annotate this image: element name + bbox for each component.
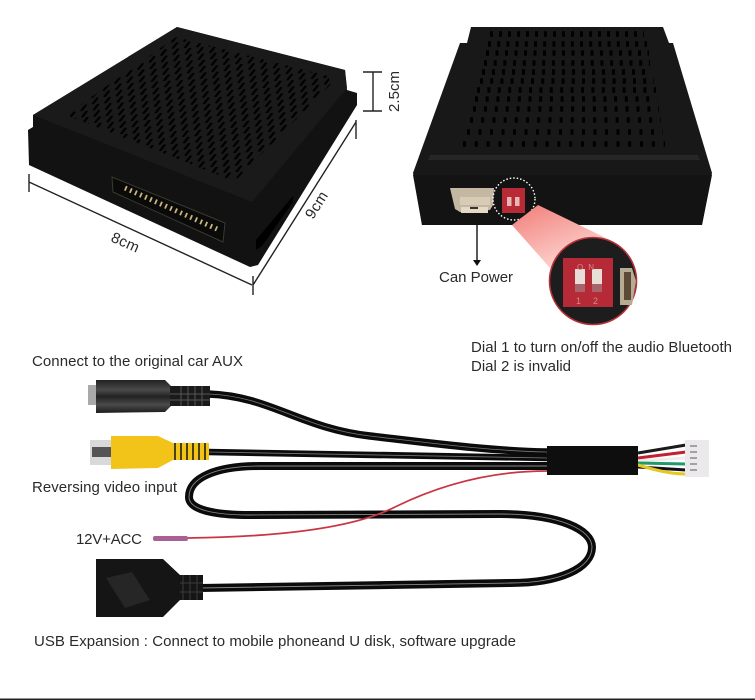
dimension: 2.5cm: 2.5cm bbox=[386, 71, 403, 112]
rca plug bbox=[90, 436, 209, 469]
dimension: 2.5cm bbox=[363, 71, 403, 112]
heat shrink sleeve bbox=[547, 446, 638, 475]
aux cable bbox=[208, 394, 547, 452]
dimension: 8cm bbox=[29, 174, 252, 285]
ventilation holes bbox=[70, 37, 330, 179]
aux plug bbox=[88, 380, 210, 413]
device photo: front view bbox=[413, 27, 712, 225]
dotted circle bbox=[493, 178, 535, 220]
module silhouette bbox=[413, 27, 712, 225]
long usb cable loop bbox=[189, 466, 592, 588]
switch 2 bbox=[592, 269, 602, 284]
label: can power: Can Power bbox=[439, 269, 513, 286]
zoom beam bbox=[512, 205, 610, 268]
gold pins bbox=[125, 188, 217, 229]
bottom rule bbox=[0, 698, 755, 700]
small dip switch bbox=[502, 188, 525, 213]
adjacent socket bbox=[620, 268, 636, 305]
colored wires bbox=[638, 445, 686, 474]
white connector bbox=[685, 440, 709, 477]
dial note bbox=[471, 339, 732, 375]
label: reversing video: Reversing video input bbox=[32, 479, 178, 496]
pink pin bbox=[153, 536, 188, 541]
dial note: Dial 2 is invalid bbox=[471, 358, 571, 375]
red switch bbox=[563, 258, 613, 307]
dimension: 9cm bbox=[253, 120, 356, 295]
cable assembly bbox=[88, 380, 709, 617]
front edge bbox=[428, 155, 700, 160]
zoomed dip switch bbox=[550, 238, 636, 324]
label: aux: Connect to the original car AUX bbox=[32, 353, 243, 370]
label: 12V+ACC: 12V+ACC bbox=[76, 531, 142, 548]
device photo: dimensions view bbox=[28, 27, 357, 267]
module top face bbox=[33, 27, 347, 202]
usb plug bbox=[96, 559, 203, 617]
zoomed dip switch: 1 bbox=[576, 296, 581, 306]
dimension: 9cm: 9cm bbox=[302, 189, 332, 222]
ventilation holes bbox=[463, 34, 665, 144]
dimension: 8cm: 8cm bbox=[108, 229, 142, 256]
label: usb expansion: USB Expansion : Connect to mobile phoneand U disk, software upgrade bbox=[34, 633, 516, 650]
front panel bbox=[413, 175, 712, 225]
pin connector bbox=[112, 177, 225, 242]
switch 1 bbox=[575, 269, 585, 284]
switch labels: ON bbox=[577, 263, 594, 272]
zoom circle bbox=[550, 238, 636, 324]
can power socket bbox=[450, 188, 494, 213]
video cable bbox=[208, 452, 547, 458]
side slot bbox=[256, 196, 293, 250]
arrow: can power bbox=[473, 225, 481, 266]
module body bbox=[28, 27, 357, 267]
zoomed dip switch: 2 bbox=[593, 296, 598, 306]
red wire bbox=[188, 471, 547, 538]
dial note: Dial 1 to turn on/off the audio Bluetooth bbox=[471, 339, 732, 356]
